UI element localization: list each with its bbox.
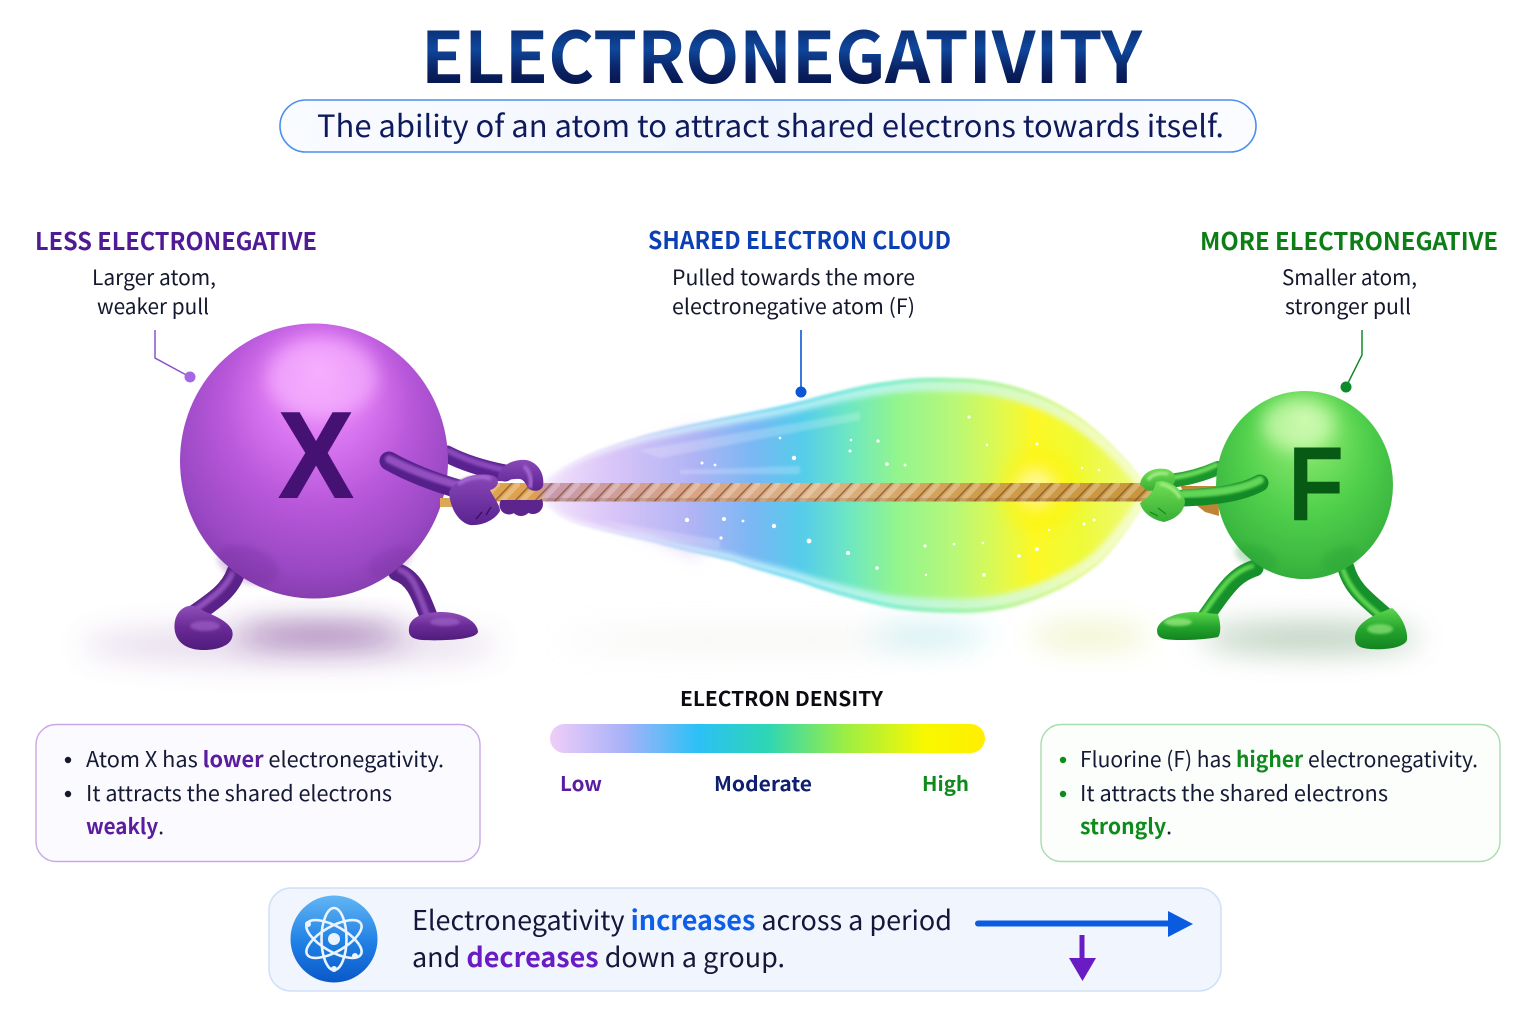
electron density legend: [550, 683, 985, 797]
panel: fluorine notes: It attracts the shared electrons: [1080, 777, 1388, 808]
leader: cloud: [796, 330, 806, 398]
panel: atom X notes: Atom X has lower electronegativity.: [86, 743, 444, 774]
electron density legend: ELECTRON DENSITY: [680, 683, 883, 712]
F hands: [1140, 469, 1185, 522]
label: more electronegative: Smaller atom,: [1282, 262, 1417, 292]
X front arm: [389, 459, 462, 490]
panel: periodic trend: and decreases down a group.: [412, 936, 785, 975]
panel: periodic trend: [269, 888, 1221, 991]
label: less electronegative: Larger atom,: [92, 262, 216, 292]
panel: fluorine notes: strongly.: [1080, 810, 1172, 841]
label: shared electron cloud: [648, 221, 951, 321]
atom X character: [174, 324, 544, 650]
trend text: Electronegativity increases across a period: [412, 899, 952, 938]
atom F character: [1140, 391, 1407, 649]
panel: fluorine notes: Fluorine (F) has higher electronegativity.: [1080, 743, 1478, 774]
ground shadows: [80, 624, 1420, 665]
electron density legend: High: [922, 768, 969, 797]
label: less electronegative: LESS ELECTRONEGATIVE: [35, 222, 317, 257]
electron density legend: Low: [560, 768, 602, 797]
rope: [488, 483, 1155, 502]
lower fingers of rear hand: [500, 494, 543, 516]
X feet: [174, 606, 478, 650]
X back arm: [447, 451, 505, 473]
label: more electronegative: [1200, 222, 1498, 321]
label: more electronegative: stronger pull: [1285, 291, 1411, 321]
panel: fluorine notes: [1041, 724, 1500, 862]
label: shared electron cloud: electronegative atom (F): [672, 291, 915, 321]
panel: atom X notes: It attracts the shared electrons: [86, 777, 392, 808]
F back arm: [1170, 465, 1218, 481]
X rope stub: [440, 498, 452, 507]
X body sphere: [180, 324, 448, 598]
F feet: [1157, 608, 1407, 649]
title: ELECTRONEGATIVITY: [421, 2, 1143, 104]
electron cloud: [536, 377, 1152, 613]
subtitle pill: The ability of an atom to attract shared electrons towards itself.: [317, 102, 1224, 146]
X hands: [449, 460, 544, 525]
leader: F: [1340, 330, 1362, 392]
streaks: [600, 412, 860, 548]
label: more electronegative: MORE ELECTRONEGATIVE: [1200, 222, 1498, 257]
F rope stub: [1180, 486, 1219, 516]
label: less electronegative: weaker pull: [97, 291, 209, 321]
icon: atom: [290, 896, 378, 982]
label: shared electron cloud: Pulled towards the more: [672, 262, 915, 292]
panel: atom X notes: weakly.: [86, 810, 164, 841]
F letter: F: [1288, 425, 1344, 543]
leader: X: [155, 330, 196, 382]
X legs: [192, 570, 431, 622]
label: less electronegative: [35, 222, 317, 321]
F legs: [1203, 566, 1390, 620]
panel: atom X notes: [36, 724, 480, 862]
arrow: down a group: [1069, 935, 1096, 981]
X letter: X: [279, 387, 353, 523]
F front arm: [1183, 480, 1260, 498]
label: shared electron cloud: SHARED ELECTRON CLOUD: [648, 221, 951, 256]
sparkles: [685, 416, 1100, 577]
electron density legend: Moderate: [714, 768, 812, 797]
F body sphere: [1216, 391, 1393, 579]
arrow: across a period: [978, 911, 1193, 937]
